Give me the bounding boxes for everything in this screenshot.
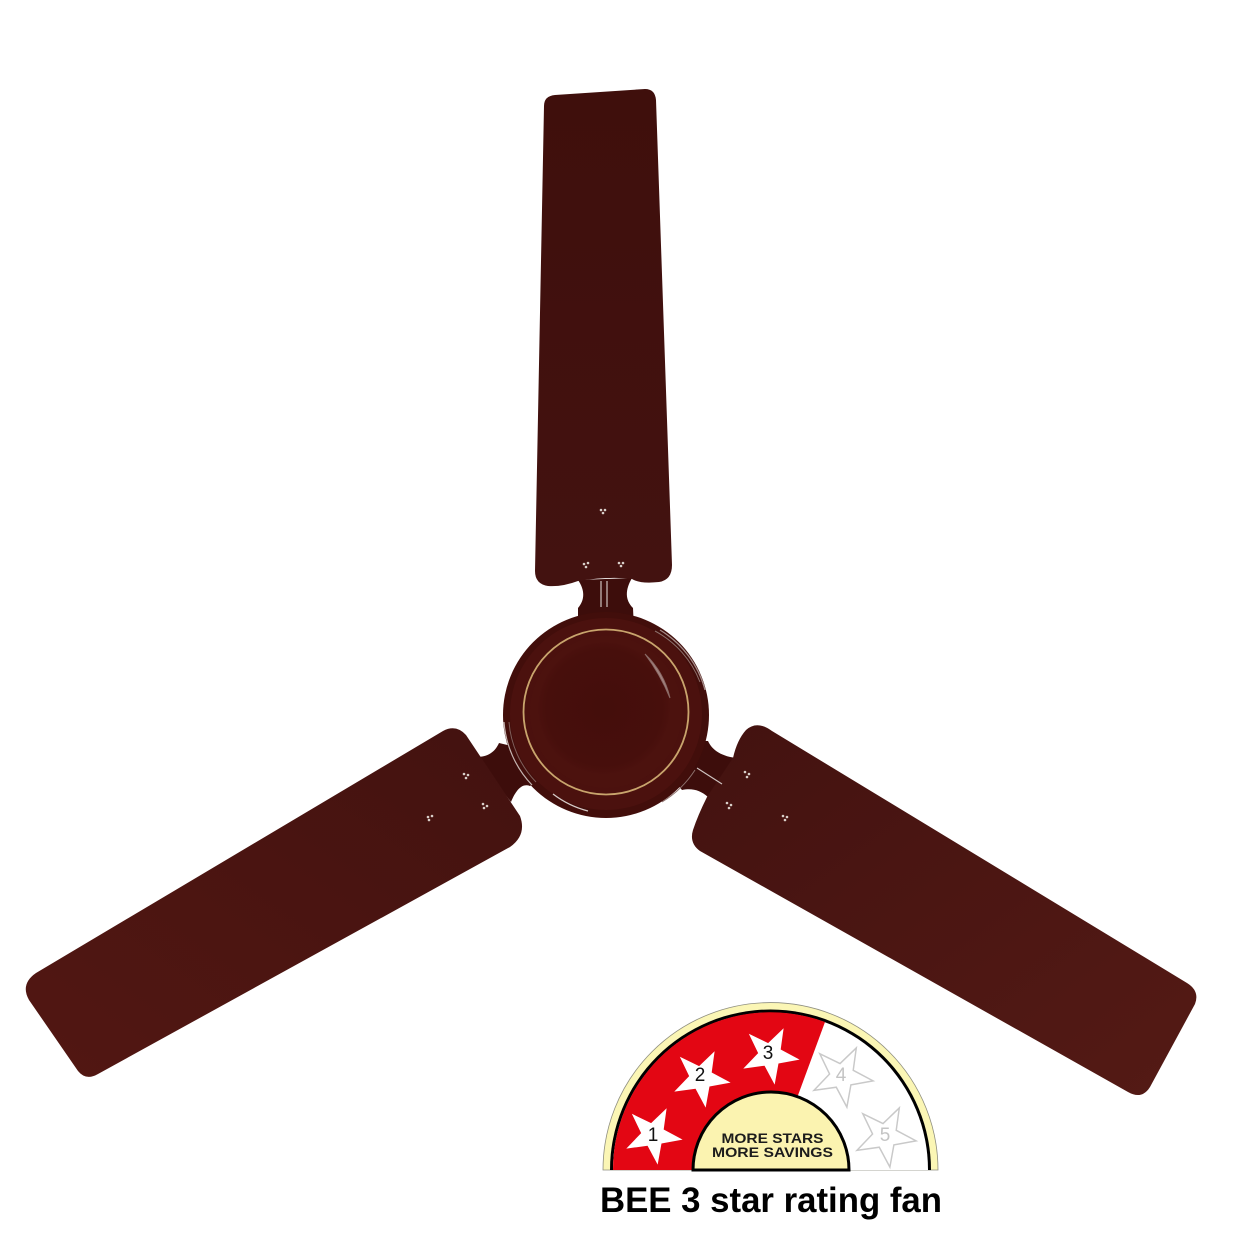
star 3 — [734, 1015, 809, 1090]
star 4 — [804, 1034, 883, 1112]
badge centre semicircle — [693, 1092, 849, 1170]
badge outer ring — [603, 1003, 938, 1170]
badge slogan: MORE SAVINGS — [712, 1144, 833, 1160]
star numbers — [648, 1043, 890, 1146]
BEE star rating badge — [603, 1003, 938, 1172]
neck: top arm — [578, 578, 634, 630]
blade screws: left blade — [427, 773, 488, 821]
blade screws: top blade — [583, 509, 624, 568]
fan — [26, 89, 1196, 1095]
right blade — [692, 725, 1196, 1095]
blade screws: right blade — [726, 771, 788, 821]
caption: BEE 3 star rating fan — [600, 1181, 942, 1220]
star numbers: 1 — [648, 1125, 658, 1146]
gold ring — [524, 630, 688, 794]
badge slogan: MORE STARS — [722, 1130, 824, 1146]
neck: right arm — [640, 740, 738, 797]
badge slogan — [712, 1130, 833, 1160]
hub dish — [530, 636, 682, 788]
star 1 — [617, 1095, 692, 1170]
neck: left arm — [476, 743, 570, 802]
badge black ring — [610, 1010, 931, 1170]
star 2 — [665, 1038, 740, 1113]
badge red field — [613, 1012, 825, 1170]
star numbers: 4 — [836, 1065, 847, 1086]
top blade — [535, 89, 672, 586]
badge white field — [613, 1013, 928, 1170]
arm highlights — [601, 581, 722, 784]
hub highlights — [660, 630, 705, 690]
dish highlight — [645, 654, 670, 698]
star numbers: 3 — [763, 1043, 773, 1064]
star numbers: 5 — [880, 1125, 890, 1146]
star numbers: 2 — [695, 1065, 705, 1086]
motor hub — [503, 612, 709, 818]
left blade — [26, 728, 522, 1077]
star 5 — [847, 1094, 926, 1172]
